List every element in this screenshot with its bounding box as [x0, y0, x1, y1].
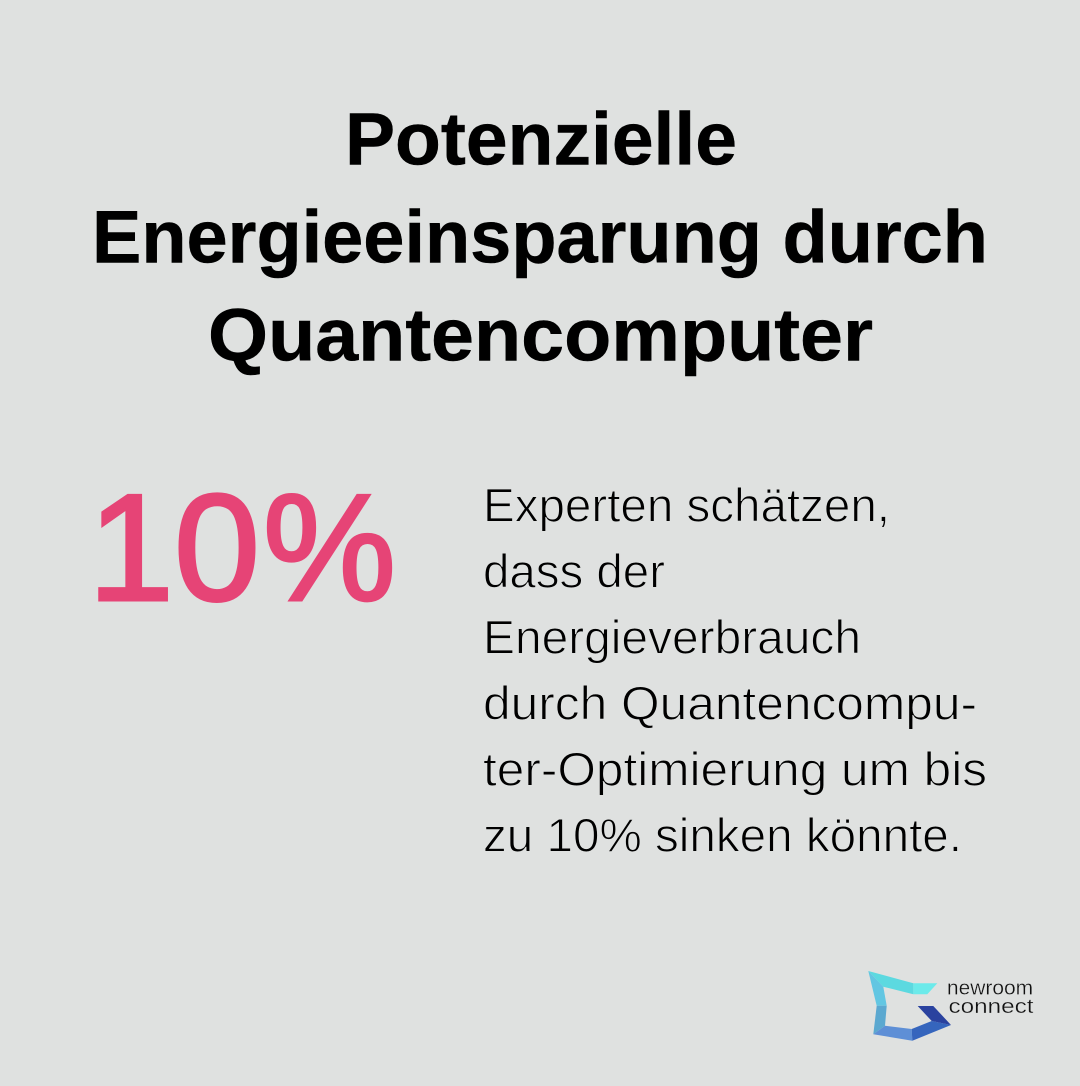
description text: durch Quantencompu- [483, 678, 977, 731]
title: Energieeinsparung durch [92, 196, 988, 278]
big statistic: 10% [88, 463, 396, 633]
icon: logo mark [868, 971, 951, 1041]
title [92, 98, 988, 376]
logo wordmark: newroom [947, 977, 1033, 999]
logo: newroom connect [868, 971, 1034, 1041]
description text: ter-Optimierung um bis [483, 744, 987, 797]
big statistic: 10%: 10 [88, 463, 260, 633]
big statistic: 10%: % [263, 463, 396, 633]
description text [483, 480, 987, 863]
description text: Experten schätzen, [483, 480, 890, 533]
title: Potenzielle [345, 98, 737, 180]
description text: zu 10% sinken könnte. [483, 810, 962, 863]
description text: dass der [483, 546, 665, 599]
title: Quantencomputer [208, 294, 873, 376]
description text: Energieverbrauch [483, 612, 861, 665]
logo wordmark: connect [948, 996, 1034, 1018]
logo wordmark [947, 977, 1034, 1018]
